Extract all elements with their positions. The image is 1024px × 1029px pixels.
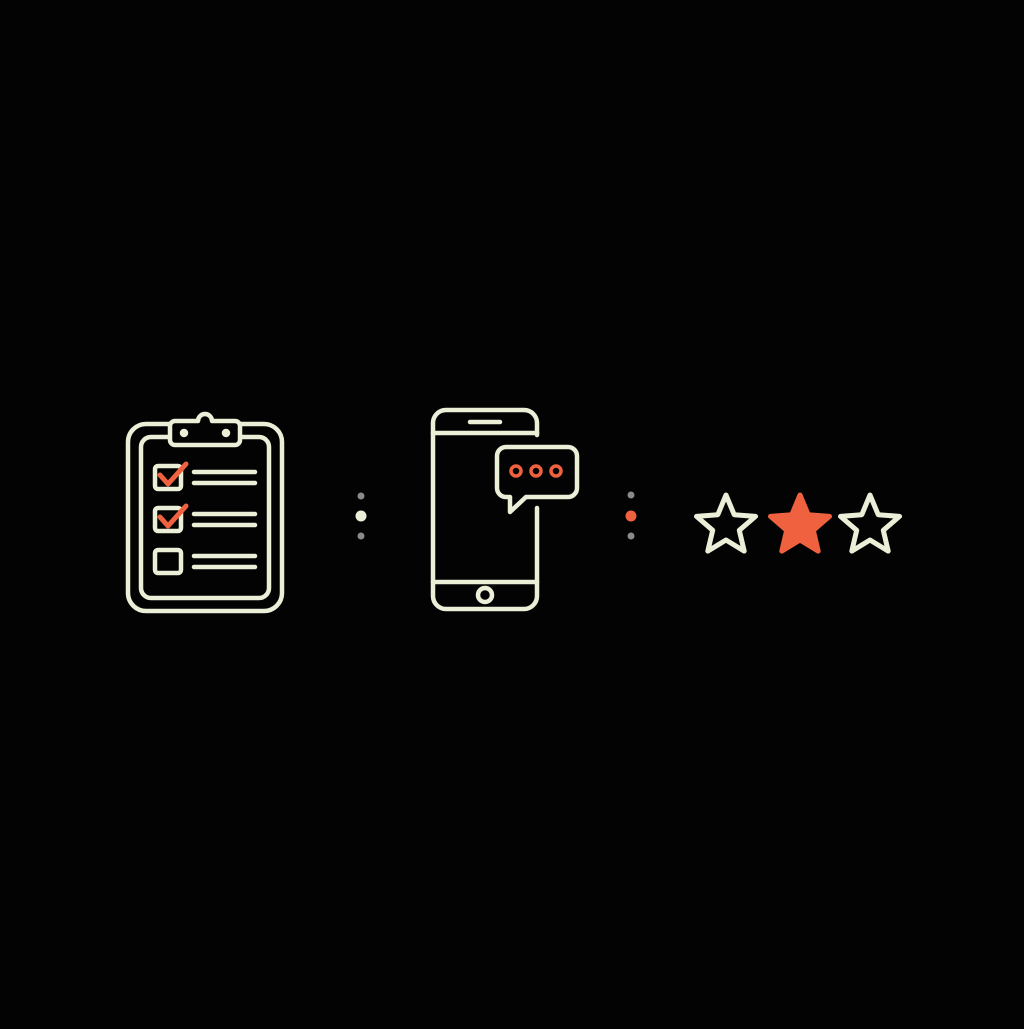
icon: clipboard checklist [128,414,282,611]
icon: phone with chat bubble [433,410,577,609]
icon: star rating [696,495,900,551]
divider dots 1 [356,492,366,540]
divider dots 2 [626,492,636,540]
